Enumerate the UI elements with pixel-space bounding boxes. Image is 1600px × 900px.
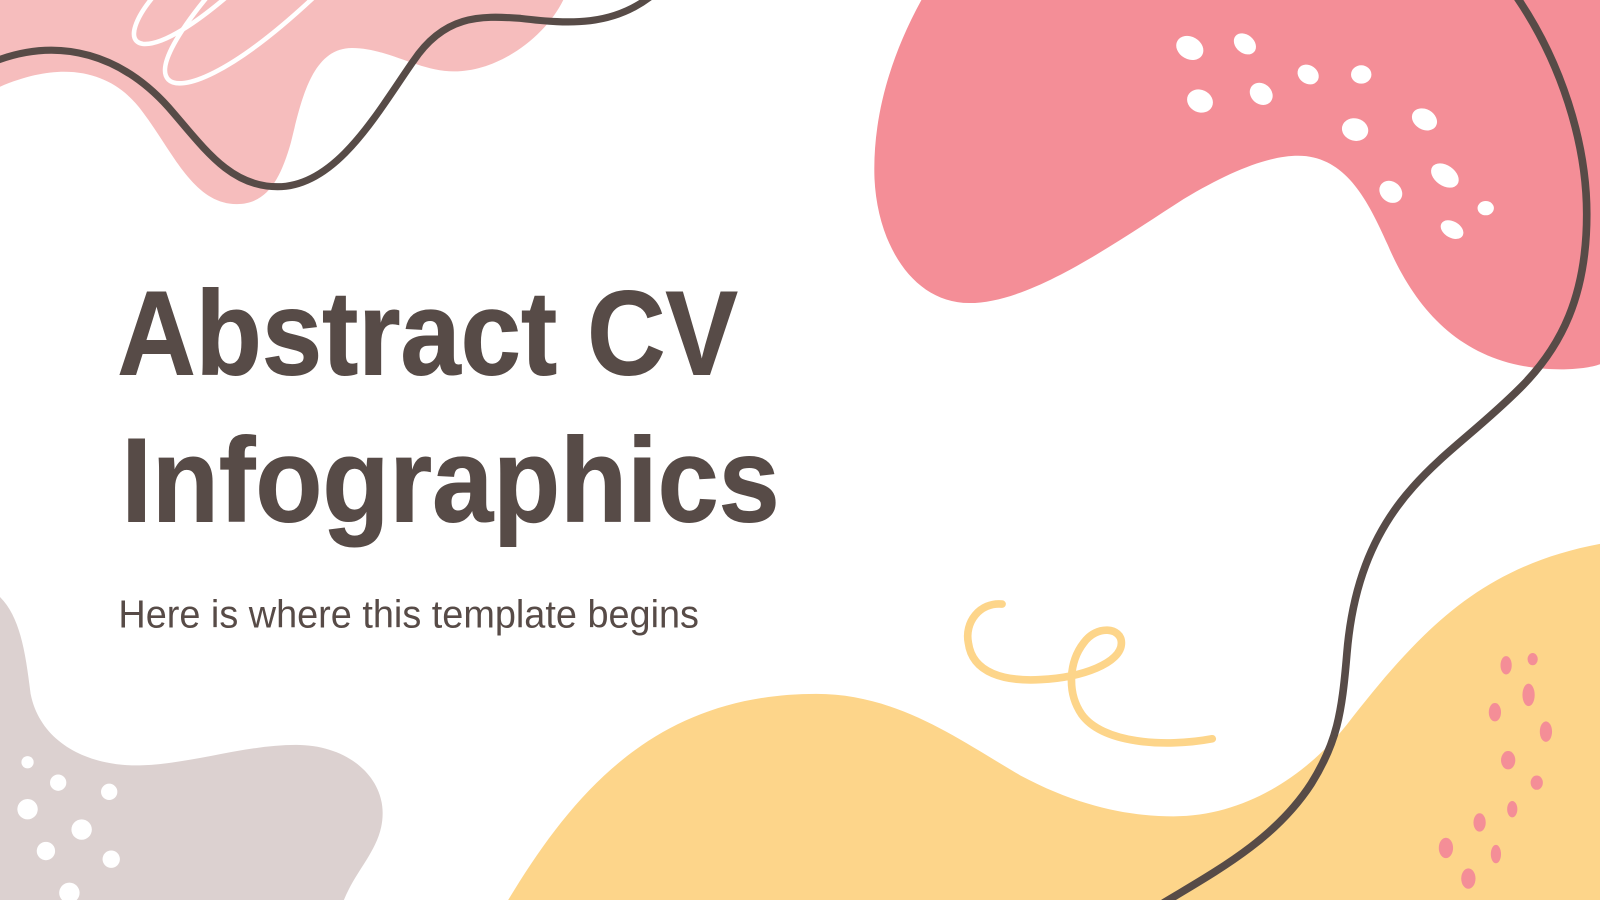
- blob: yellow bottom right: [508, 544, 1600, 900]
- title: Abstract CV: [117, 267, 738, 400]
- dots: white on coral blob: [1172, 29, 1494, 243]
- scribble: white loops top left: [134, 0, 316, 83]
- title: Infographics: [121, 414, 780, 547]
- curved line: top left: [0, 0, 650, 187]
- blob: blush pink top left: [0, 0, 563, 204]
- title: [117, 267, 780, 547]
- curved line: right side: [1163, 0, 1587, 900]
- dots: pink on yellow blob: [1439, 653, 1552, 889]
- blob: coral top right: [874, 0, 1600, 369]
- scribble: yellow loop: [968, 604, 1212, 743]
- subtitle: Here is where this template begins: [118, 594, 699, 637]
- dots: white on taupe blob: [17, 756, 120, 900]
- blob: taupe bottom left: [0, 597, 383, 900]
